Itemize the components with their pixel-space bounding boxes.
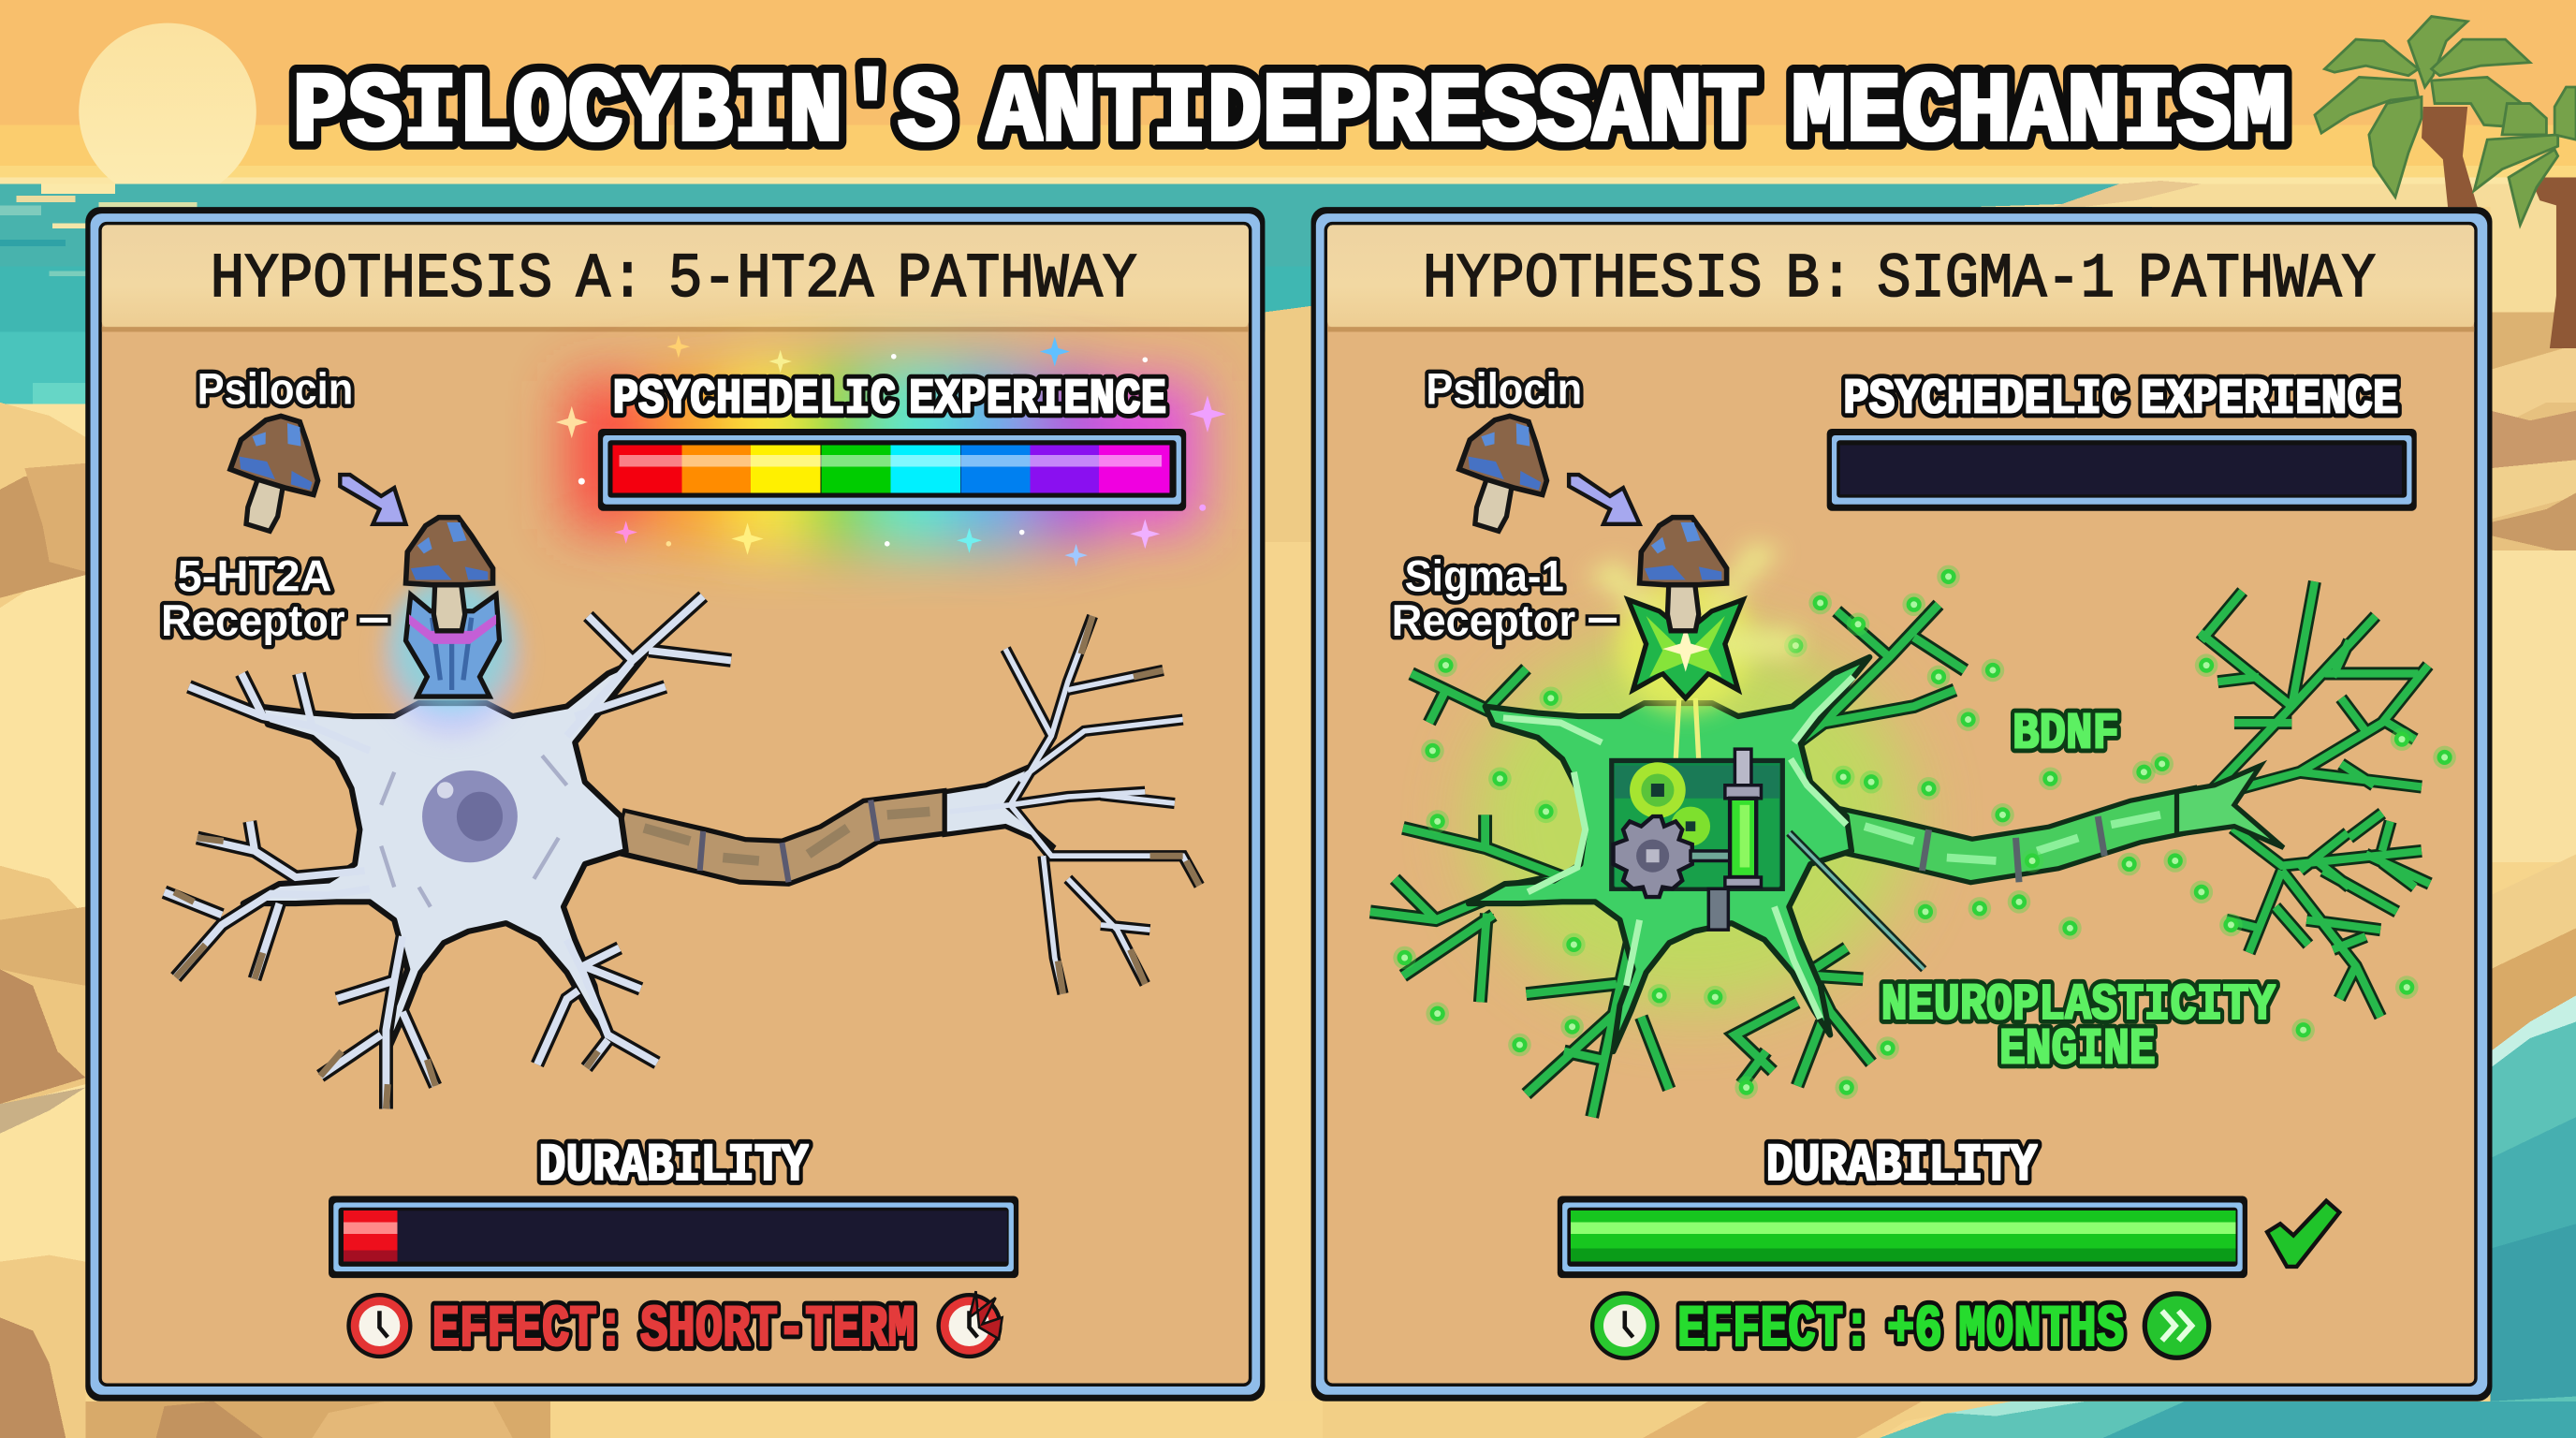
terminal hub B <box>2177 766 2284 847</box>
neuron B <box>1370 565 2456 1117</box>
label: 5-HT2A receptor <box>161 552 389 646</box>
stem above engine <box>1676 698 1699 760</box>
icon: check mark <box>2267 1201 2339 1267</box>
icon: free mushroom B <box>1445 406 1561 540</box>
label: sigma-1 receptor: Sigma-1 <box>1405 552 1564 602</box>
dendrites B green <box>1370 581 2430 1117</box>
text: effect +6 months: EFFECT: +6 MONTHS <box>1677 1296 2124 1363</box>
receptor glow <box>383 579 520 736</box>
durability fill B <box>1571 1211 2236 1262</box>
heading: hypothesis A: HYPOTHESIS A: 5-HT2A PATHWAY <box>211 244 1137 315</box>
callout line: neuroplasticity engine <box>1789 833 1924 969</box>
axon A <box>618 800 949 882</box>
panel: hypothesis A <box>85 207 1265 1401</box>
icon: bound mushroom A <box>406 518 493 631</box>
green gear large <box>1630 762 1686 818</box>
background: sea <box>0 184 2152 433</box>
durability meter A <box>329 1196 1018 1278</box>
label: neuroplasticity engine: ENGINE <box>1999 1021 2156 1078</box>
soma A <box>243 657 644 1051</box>
label: 5-HT2A receptor: 5-HT2A <box>178 552 332 602</box>
background: right sea <box>1314 995 2576 1438</box>
durability fill A <box>344 1211 398 1262</box>
soma A shading <box>381 756 567 907</box>
rainbow glow <box>567 365 1199 549</box>
icon: sigma-1 receptor <box>1586 542 1799 713</box>
piston <box>1708 888 1728 930</box>
dendrites A outline <box>165 596 1199 1108</box>
label: neuroplasticity engine: NEUROPLASTICITY <box>1881 977 2276 1034</box>
label: psilocin A: Psilocin <box>198 365 353 415</box>
label: psychedelic experience A: PSYCHEDELIC EXPERIENCE <box>613 371 1166 427</box>
soma B highlights <box>1503 677 1853 1019</box>
label: durability B: DURABILITY <box>1766 1136 2038 1196</box>
gray gear <box>1614 816 1692 897</box>
panel A header band <box>102 225 1249 327</box>
background: left dunes <box>0 403 1323 1438</box>
receptor B glow <box>1586 542 1799 713</box>
label: psilocin B: Psilocin <box>1426 365 1582 415</box>
label: neuroplasticity engine <box>1881 977 2276 1078</box>
label: psychedelic experience B: PSYCHEDELIC EXPERIENCE <box>1843 371 2398 427</box>
neuron A <box>165 579 1199 1108</box>
neuroplasticity engine <box>1612 749 1782 930</box>
effect row B <box>1590 1291 2211 1363</box>
dendrites A core <box>165 596 1199 1108</box>
rainbow meter <box>598 429 1186 511</box>
nucleus A <box>422 770 518 862</box>
background: palm trees <box>2315 17 2576 348</box>
heading: hypothesis B: HYPOTHESIS B: SIGMA-1 PATHWAY <box>1423 244 2376 315</box>
effect row A <box>346 1291 1003 1363</box>
icon: clock A <box>346 1293 413 1358</box>
durability meter B <box>1558 1196 2247 1278</box>
arrow: mushroom to sigma-1 receptor <box>1569 475 1640 524</box>
terminal hub A <box>944 766 1055 847</box>
label: BDNF: BDNF <box>2012 706 2119 763</box>
background: sunset sky <box>0 0 2576 185</box>
label: 5-HT2A receptor: Receptor <box>161 596 345 646</box>
icon: free mushroom A <box>216 406 332 540</box>
icon: breaking clock A <box>936 1291 1003 1358</box>
icon: bound mushroom B <box>1640 518 1727 631</box>
neuron B glow <box>1471 633 1914 1010</box>
background: sun <box>79 23 256 200</box>
icon: clock B <box>1590 1291 1660 1360</box>
green gear small <box>1671 807 1710 846</box>
panel B header band <box>1327 225 2474 327</box>
panel: hypothesis B <box>1311 207 2492 1401</box>
BDNF particles <box>1393 565 2456 1099</box>
label: sigma-1 receptor <box>1392 552 1618 646</box>
icon: fast-forward badge <box>2143 1291 2211 1360</box>
soma B <box>1469 657 1869 1051</box>
arrow: mushroom to 5-HT2A receptor <box>340 475 406 524</box>
drive shaft <box>1690 851 1732 860</box>
green cylinder <box>1725 749 1761 888</box>
empty psychedelic meter <box>1827 429 2417 511</box>
sparkles around rainbow bar <box>556 335 1226 566</box>
label: sigma-1 receptor: Receptor <box>1392 596 1575 646</box>
background: right beach and shore <box>1265 181 2576 1413</box>
icon: 5-HT2A receptor <box>392 579 511 710</box>
title: PSILOCYBIN'S ANTIDEPRESSANT MECHANISM <box>292 57 2287 169</box>
axon B <box>1782 808 2202 882</box>
text: effect short-term: EFFECT: SHORT-TERM <box>432 1296 915 1363</box>
dendrites B outline <box>1370 581 2430 1117</box>
label: durability A: DURABILITY <box>539 1136 809 1196</box>
